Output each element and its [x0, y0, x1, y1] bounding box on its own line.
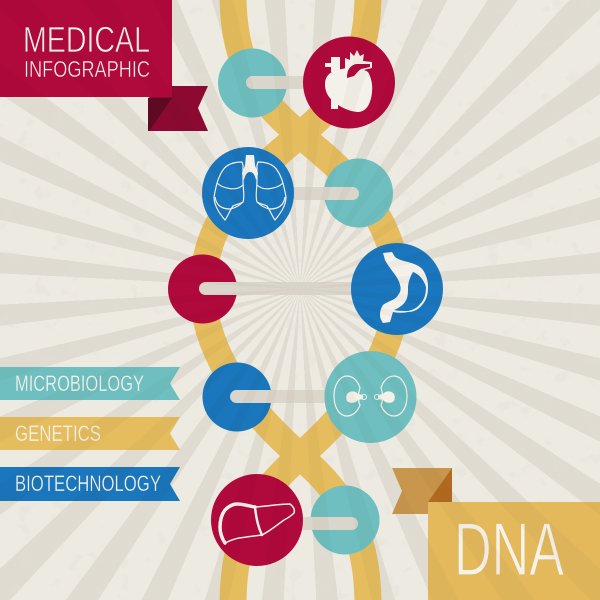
- connector 1: [246, 76, 308, 89]
- heart circle: [303, 36, 395, 128]
- label: microbiology: [0, 367, 180, 400]
- label: biotechnology: [0, 467, 180, 501]
- connector 5: [298, 517, 358, 530]
- teal node 1: [218, 48, 287, 118]
- lungs circle: [202, 147, 294, 239]
- label: biotechnology: BIOTECHNOLOGY: [15, 471, 161, 496]
- label: genetics: GENETICS: [15, 421, 101, 446]
- stomach circle: [351, 243, 443, 335]
- icon: stomach: [380, 252, 428, 323]
- connector 2: [290, 187, 359, 200]
- connector 3: [199, 282, 356, 295]
- blue node: [202, 362, 272, 432]
- teal node 3: [310, 486, 380, 554]
- liver circle: [211, 474, 303, 566]
- title panel: [0, 0, 172, 97]
- DNA helix strands: [203, 0, 397, 600]
- icon: kidneys: [334, 376, 407, 416]
- icon: lungs: [214, 155, 286, 220]
- title: infographic: INFOGRAPHIC: [24, 56, 150, 82]
- label: microbiology: MICROBIOLOGY: [15, 371, 144, 396]
- DNA panel: [428, 502, 600, 600]
- title: medical: MEDICAL: [23, 19, 150, 60]
- ribbon: title tail: [148, 86, 208, 131]
- red node: [168, 254, 237, 324]
- icon: heart: [325, 50, 372, 112]
- icon: liver: [220, 504, 294, 543]
- teal node 2: [324, 158, 393, 228]
- connector 4: [230, 390, 330, 403]
- kidneys circle: [324, 351, 416, 443]
- ribbon: DNA tail: [392, 468, 452, 514]
- label: genetics: [0, 417, 180, 450]
